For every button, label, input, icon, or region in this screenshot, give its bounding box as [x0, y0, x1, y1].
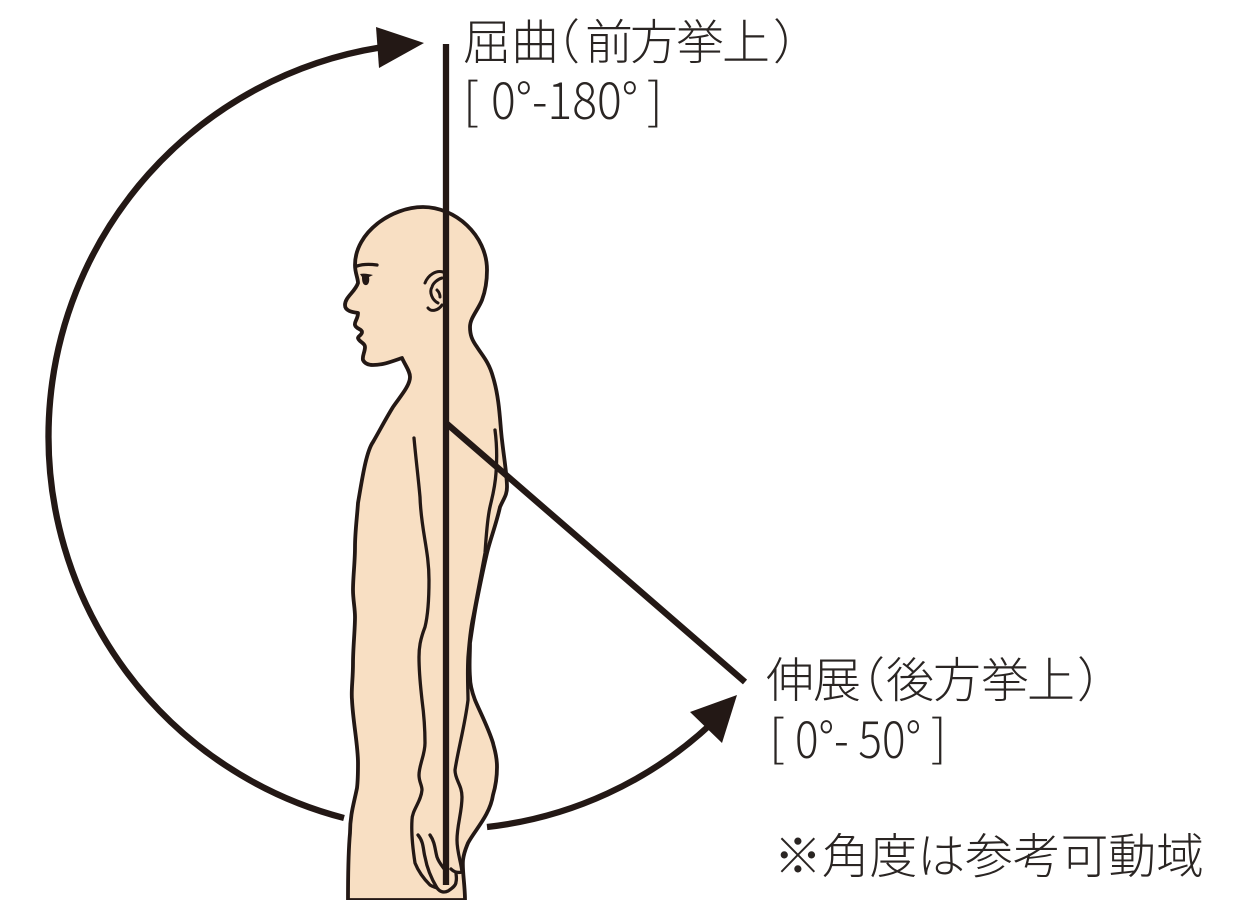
label: extension range: [	[769, 699, 785, 771]
label: extension range: 0°- 50°	[795, 701, 921, 773]
label: extension: 伸展（後方挙上）	[766, 641, 1125, 711]
label: flexion range: [	[463, 62, 479, 134]
label: flexion: 屈曲（前方挙上）	[463, 3, 821, 73]
ear	[425, 272, 443, 310]
human body figure	[345, 207, 507, 900]
front arm and hand contour	[412, 438, 456, 892]
label: flexion range: 0°-180°	[491, 62, 638, 134]
fingers	[418, 835, 445, 888]
body outline	[345, 207, 507, 900]
back arm contour	[451, 430, 497, 872]
extension angle line	[446, 423, 745, 682]
label: extension range: ]	[931, 699, 947, 771]
extension arc arrow	[487, 695, 737, 827]
flexion arc arrow	[49, 27, 424, 818]
vertical reference line	[443, 44, 449, 885]
arrowhead: extension	[690, 695, 737, 743]
eyebrow	[357, 264, 377, 266]
arrowhead: flexion	[376, 27, 424, 68]
note: ※角度は参考可動域	[774, 817, 1204, 887]
label: flexion range: ]	[647, 62, 663, 134]
eye	[360, 274, 373, 285]
